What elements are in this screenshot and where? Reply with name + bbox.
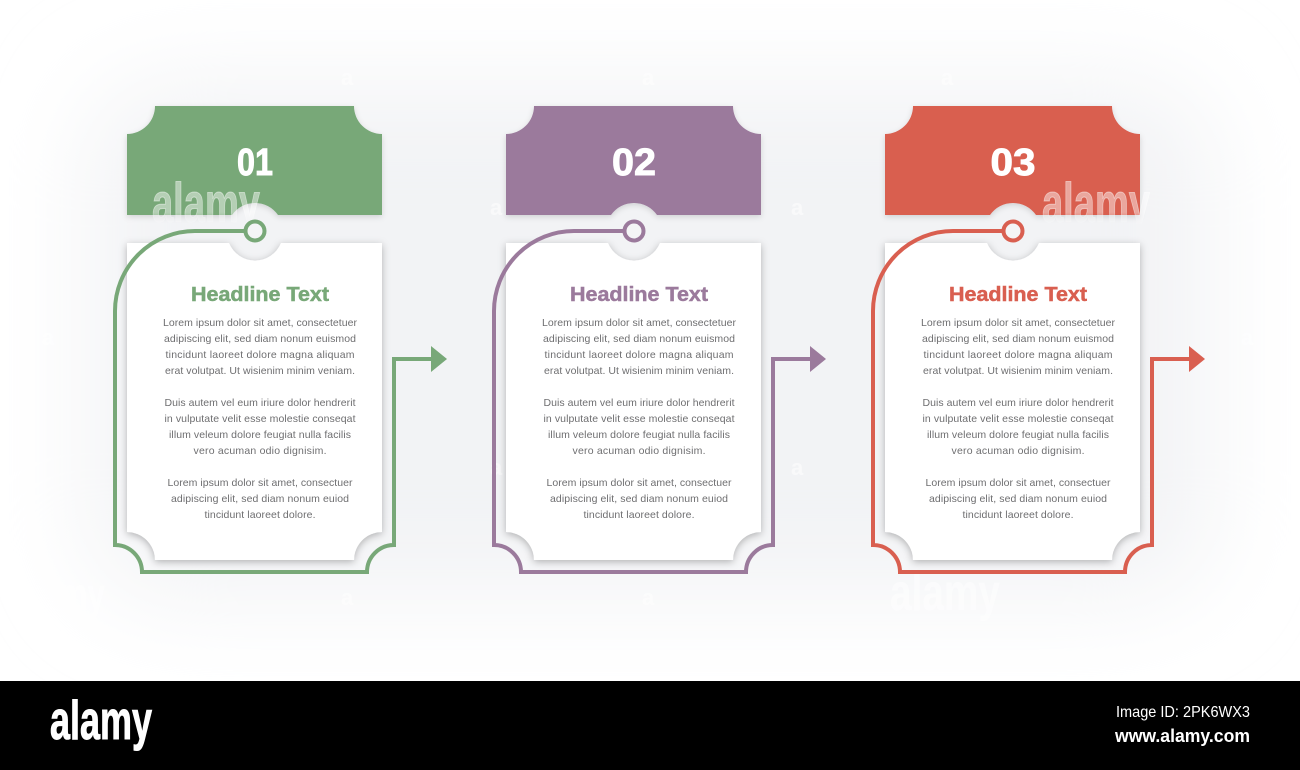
body text: step 03: adipiscing elit, sed diam nonum euismod (922, 333, 1114, 345)
body text: step 01: adipiscing elit, sed diam nonum euismod (164, 333, 356, 345)
footer logo: alamy (50, 689, 152, 751)
tab: step 02 (506, 106, 761, 215)
connector arrow line: step 02 (494, 231, 812, 572)
body text: step 02: Lorem ipsum dolor sit amet, consectuer (546, 477, 732, 489)
card: step 02 (506, 243, 761, 560)
body text: step 02: tincidunt laoreet dolore. (584, 509, 694, 521)
body text: step 01: Lorem ipsum dolor sit amet, consectuer (168, 477, 353, 489)
body text: step 02: Lorem ipsum dolor sit amet, consectetuer (542, 317, 736, 329)
faint watermarks: a (341, 585, 354, 610)
headline: step 03: Headline Text (949, 284, 1087, 306)
faint watermarks: a (791, 455, 804, 480)
body text: step 03 (921, 317, 1116, 521)
ring node: step 03 (1004, 222, 1022, 240)
faint watermarks: alamy (15, 568, 105, 620)
body text: step 02: vero acuman odio dignisim. (572, 445, 706, 457)
faint watermarks: a (490, 195, 503, 220)
body text: step 03: vero acuman odio dignisim. (952, 445, 1084, 457)
arrowhead: step 03 (1189, 346, 1205, 372)
body text: step 01: in vulputate velit esse molestie conseqat (164, 413, 356, 425)
number 03: 03 (990, 142, 1036, 184)
faint watermarks: a (1241, 325, 1254, 350)
body text: step 02: tincidunt laoreet dolore magna aliquam (544, 349, 734, 361)
card: step 01 (127, 243, 382, 560)
body text: step 01: tincidunt laoreet dolore. (204, 509, 316, 521)
ring node: step 01 (246, 222, 264, 240)
body text: step 02: adipiscing elit, sed diam nonum euismod (543, 333, 735, 345)
body text: step 01: Duis autem vel eum iriure dolor hendrerit (164, 397, 356, 409)
connector arrow line: step 01 (115, 231, 433, 572)
body text: step 03: adipiscing elit, sed diam nonum euiod (929, 493, 1107, 505)
number 02: 02 (612, 142, 656, 184)
tab: step 03 (885, 106, 1140, 215)
arrowhead: step 01 (431, 346, 447, 372)
faint watermarks: a (490, 455, 503, 480)
body text: step 03: illum veleum dolore feugiat nulla facilis (927, 429, 1109, 441)
watermark on green tab: alamy (152, 171, 260, 234)
faint watermarks (15, 65, 1254, 622)
faint watermarks: alamy (890, 564, 1000, 622)
arrowhead: step 02 (810, 346, 826, 372)
footer bar (0, 681, 1300, 770)
body text: step 01: Lorem ipsum dolor sit amet, consectetuer (163, 317, 358, 329)
body text: step 01 (163, 317, 358, 521)
tab: step 01 (127, 106, 382, 215)
number 01: 01 (237, 142, 273, 184)
body text: step 01: adipiscing elit, sed diam nonum euiod (171, 493, 349, 505)
soft background glow (90, 85, 1210, 595)
card: step 03 (885, 243, 1140, 560)
body text: step 03: erat volutpat. Ut wisienim minim veniam. (923, 365, 1113, 377)
panel: step 01 (115, 106, 447, 572)
body text: step 01: illum veleum dolore feugiat nulla facilis (169, 429, 351, 441)
body text: step 01: tincidunt laoreet dolore magna aliquam (166, 349, 355, 361)
panel: step 02 (494, 106, 826, 572)
faint watermarks: a (341, 65, 354, 90)
body text: step 02: erat volutpat. Ut wisienim minim veniam. (544, 365, 734, 377)
body text: step 01: erat volutpat. Ut wisienim minim veniam. (165, 365, 355, 377)
body text: step 02 (542, 317, 736, 521)
watermark on red tab: alamy (1042, 171, 1150, 234)
connector arrow line: step 03 (873, 231, 1191, 572)
body text: step 01: vero acuman odio dignisim. (194, 445, 326, 457)
body text: step 03: tincidunt laoreet dolore magna aliquam (924, 349, 1113, 361)
faint watermarks: a (642, 585, 655, 610)
body text: step 03: Lorem ipsum dolor sit amet, consectetuer (921, 317, 1116, 329)
body text: step 03: in vulputate velit esse molestie conseqat (922, 413, 1114, 425)
body text: step 02: adipiscing elit, sed diam nonum euiod (550, 493, 728, 505)
panel: step 03 (873, 106, 1205, 572)
faint watermarks: a (791, 195, 804, 220)
body text: step 02: in vulputate velit esse molestie conseqat (544, 413, 735, 425)
headline: step 02: Headline Text (570, 284, 708, 306)
website: www.alamy.com (1114, 725, 1250, 746)
body text: step 02: illum veleum dolore feugiat nulla facilis (548, 429, 730, 441)
faint watermarks: a (42, 325, 55, 350)
ring node: step 02 (624, 222, 644, 240)
body text: step 02: Duis autem vel eum iriure dolor hendrerit (544, 397, 735, 409)
body text: step 03: Lorem ipsum dolor sit amet, consectuer (926, 477, 1111, 489)
faint watermarks: a (941, 65, 954, 90)
body text: step 03: Duis autem vel eum iriure dolor hendrerit (922, 397, 1114, 409)
image id: Image ID: 2PK6WX3 (1116, 704, 1250, 721)
faint watermarks: a (642, 65, 655, 90)
body text: step 03: tincidunt laoreet dolore. (962, 509, 1074, 521)
headline: step 01: Headline Text (191, 284, 329, 306)
